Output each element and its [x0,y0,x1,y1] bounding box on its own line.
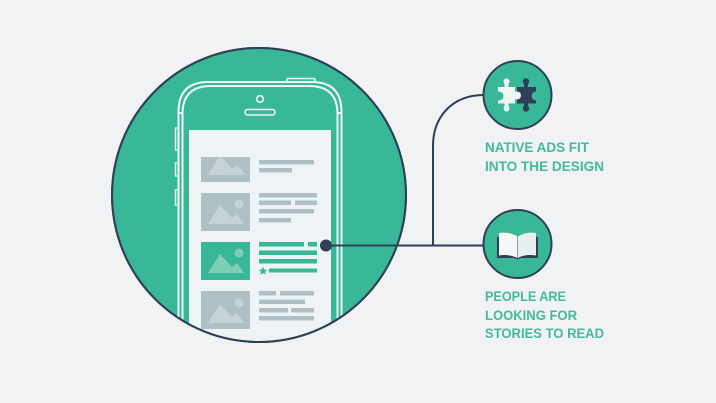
label: native ads [485,140,604,174]
phone screen [189,130,331,345]
label: people: STORIES TO READ [485,326,604,341]
phone outline [174,78,342,320]
puzzle icon circle [484,61,552,129]
article row 1 [201,157,314,182]
label: native ads: INTO THE DESIGN [485,159,604,174]
label: native ads: NATIVE ADS FIT [485,140,590,155]
native ad row (highlighted) [201,242,317,280]
article row 2 [201,193,317,231]
icon: open book [497,233,538,260]
navy puzzle piece [517,78,536,112]
white puzzle piece [498,78,515,112]
book icon circle [484,210,552,278]
article row 3 [201,291,314,329]
icon: puzzle pieces [494,78,540,112]
label: people: LOOKING FOR [485,308,577,323]
connector lines [321,95,484,250]
large green circle with phone [112,48,406,360]
label: people: PEOPLE ARE [485,289,566,304]
label: people [485,289,604,341]
